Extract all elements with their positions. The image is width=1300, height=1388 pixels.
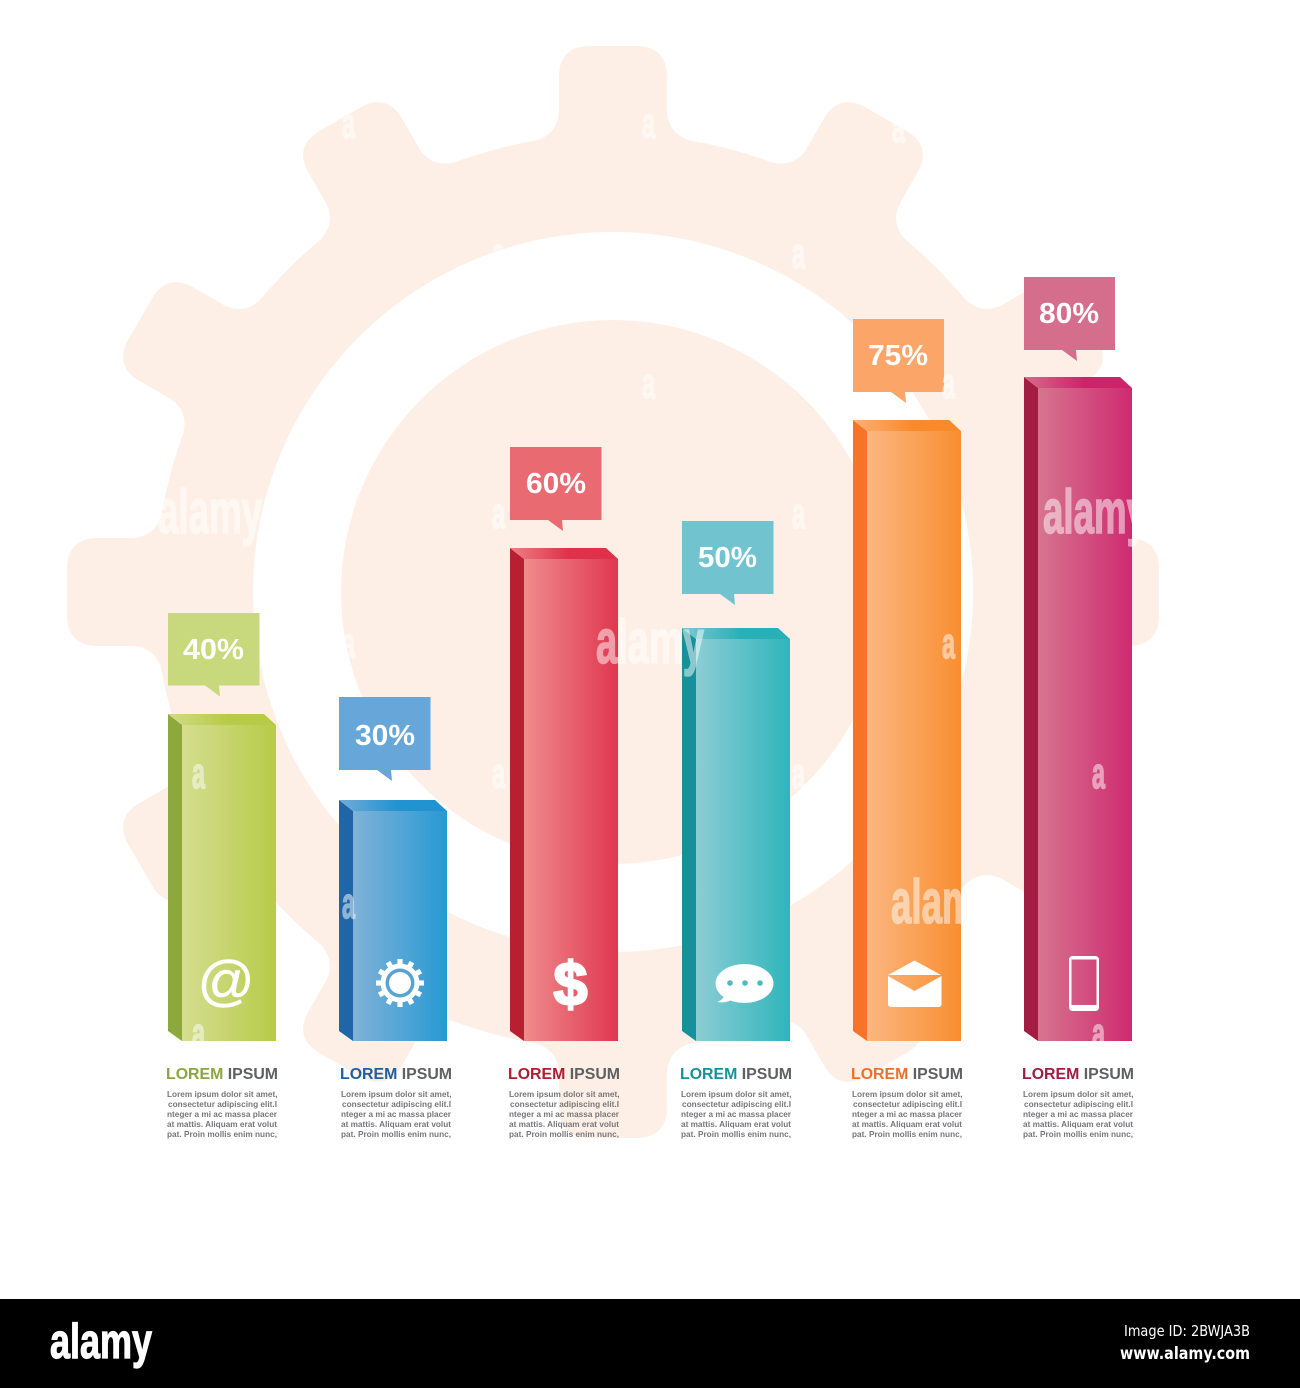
watermark overlay: [158, 99, 1147, 1058]
watermark overlay: a: [792, 489, 805, 538]
watermark overlay: a: [942, 359, 955, 408]
label: green column text: pat. Proin mollis enim nunc,: [167, 1129, 277, 1139]
watermark overlay: alamy: [158, 478, 262, 547]
watermark overlay: a: [342, 99, 355, 148]
label: green column text: Lorem ipsum dolor sit amet,: [167, 1089, 278, 1099]
label: red column text: LOREM IPSUM: [508, 1066, 620, 1083]
watermark overlay: a: [642, 359, 655, 408]
icon: speech bubble: [716, 964, 774, 1003]
watermark overlay: a: [192, 749, 205, 798]
watermark overlay: alamy: [891, 868, 995, 937]
watermark overlay: a: [892, 103, 905, 152]
watermark overlay: a: [342, 619, 355, 668]
label: teal column text: Lorem ipsum dolor sit amet,: [681, 1089, 792, 1099]
label: orange column text: nteger a mi ac massa placer: [852, 1109, 963, 1119]
callout: 40%: [168, 613, 260, 696]
watermark overlay: a: [492, 749, 505, 798]
label: blue column text: pat. Proin mollis enim nunc,: [341, 1129, 451, 1139]
label: blue column text: LOREM IPSUM: [340, 1066, 452, 1083]
callout: 50%: [682, 521, 774, 605]
icon: dollar sign: $: [554, 950, 588, 1018]
callout: 50%: 50%: [698, 542, 757, 574]
footer logo: alamy: [50, 1315, 152, 1369]
callout: 75%: [853, 319, 944, 403]
label: orange column text: [851, 1066, 963, 1139]
green bar: [168, 714, 276, 1041]
panel: orange column 75%: [851, 319, 963, 1139]
label: teal column text: nteger a mi ac massa placer: [681, 1109, 792, 1119]
icon: smartphone: [1069, 956, 1099, 1011]
callout: 30%: 30%: [355, 720, 415, 752]
watermark overlay: a: [1092, 749, 1105, 798]
blue bar: [339, 800, 447, 1041]
website: www.alamy.com: [1120, 1344, 1250, 1364]
callout: 60%: 60%: [526, 468, 586, 500]
label: blue column text: nteger a mi ac massa placer: [341, 1109, 452, 1119]
label: orange column text: pat. Proin mollis enim nunc,: [852, 1129, 962, 1139]
icon: at sign: @: [198, 949, 254, 1012]
label: red column text: [508, 1066, 620, 1139]
label: magenta column text: [1022, 1066, 1134, 1139]
callout: 80%: [1024, 277, 1115, 361]
label: orange column text: at mattis. Aliquam erat volut: [852, 1119, 962, 1129]
label: teal column text: at mattis. Aliquam erat volut: [681, 1119, 791, 1129]
label: magenta column text: at mattis. Aliquam erat volut: [1023, 1119, 1133, 1129]
label: magenta column text: Lorem ipsum dolor sit amet,: [1023, 1089, 1134, 1099]
label: red column text: pat. Proin mollis enim nunc,: [509, 1129, 619, 1139]
label: blue column text: at mattis. Aliquam erat volut: [341, 1119, 451, 1129]
watermark overlay: a: [1092, 1009, 1105, 1058]
label: red column text: at mattis. Aliquam erat volut: [509, 1119, 619, 1129]
label: red column text: nteger a mi ac massa placer: [509, 1109, 620, 1119]
callout: 80%: 80%: [1039, 298, 1099, 330]
watermark overlay: a: [342, 879, 355, 928]
label: blue column text: consectetur adipiscing elit.I: [342, 1099, 451, 1109]
label: green column text: consectetur adipiscing elit.I: [168, 1099, 277, 1109]
label: blue column text: [340, 1066, 452, 1139]
label: magenta column text: nteger a mi ac massa placer: [1023, 1109, 1134, 1119]
panel: magenta column 80%: [1022, 277, 1134, 1139]
icon: envelope: [888, 960, 942, 1007]
watermark overlay: a: [792, 229, 805, 278]
label: green column text: at mattis. Aliquam erat volut: [167, 1119, 277, 1129]
label: blue column text: Lorem ipsum dolor sit amet,: [341, 1089, 452, 1099]
panel: red column 60%: [508, 447, 620, 1139]
panel: teal column 50%: [680, 521, 792, 1139]
label: orange column text: LOREM IPSUM: [851, 1066, 963, 1083]
footer bar: [0, 1299, 1300, 1388]
callout: 60%: [510, 447, 602, 531]
label: orange column text: consectetur adipiscing elit.I: [853, 1099, 962, 1109]
watermark overlay: a: [642, 99, 655, 148]
label: magenta column text: consectetur adipiscing elit.I: [1024, 1099, 1133, 1109]
icon: gear: [376, 959, 424, 1007]
watermark overlay: a: [192, 1009, 205, 1058]
label: red column text: consectetur adipiscing elit.I: [510, 1099, 619, 1109]
panel: blue column 30%: [339, 697, 452, 1139]
image id: Image ID: 2BWJA3B: [1124, 1322, 1250, 1340]
label: teal column text: LOREM IPSUM: [680, 1066, 792, 1083]
red bar: [510, 548, 618, 1041]
background gear: [67, 46, 1159, 1138]
panel: green column 40%: [166, 613, 278, 1139]
label: magenta column text: LOREM IPSUM: [1022, 1066, 1134, 1083]
watermark overlay: a: [492, 489, 505, 538]
teal bar: [682, 628, 790, 1041]
label: magenta column text: pat. Proin mollis enim nunc,: [1023, 1129, 1133, 1139]
watermark overlay: a: [942, 619, 955, 668]
callout: 75%: 75%: [868, 340, 928, 372]
watermark overlay: alamy: [1043, 478, 1147, 547]
label: green column text: [166, 1066, 278, 1139]
label: teal column text: consectetur adipiscing elit.I: [682, 1099, 791, 1109]
watermark overlay: alamy: [596, 608, 704, 677]
label: orange column text: Lorem ipsum dolor sit amet,: [852, 1089, 962, 1099]
label: red column text: Lorem ipsum dolor sit amet,: [509, 1089, 620, 1099]
label: teal column text: [680, 1066, 792, 1139]
label: teal column text: pat. Proin mollis enim nunc,: [681, 1129, 791, 1139]
callout: 30%: [339, 697, 430, 781]
callout: 40%: 40%: [183, 634, 244, 666]
label: green column text: nteger a mi ac massa placer: [167, 1109, 278, 1119]
orange bar: [853, 420, 961, 1041]
label: green column text: LOREM IPSUM: [166, 1066, 278, 1083]
watermark overlay: a: [792, 749, 805, 798]
watermark overlay: a: [492, 229, 505, 278]
magenta bar: [1024, 377, 1132, 1041]
